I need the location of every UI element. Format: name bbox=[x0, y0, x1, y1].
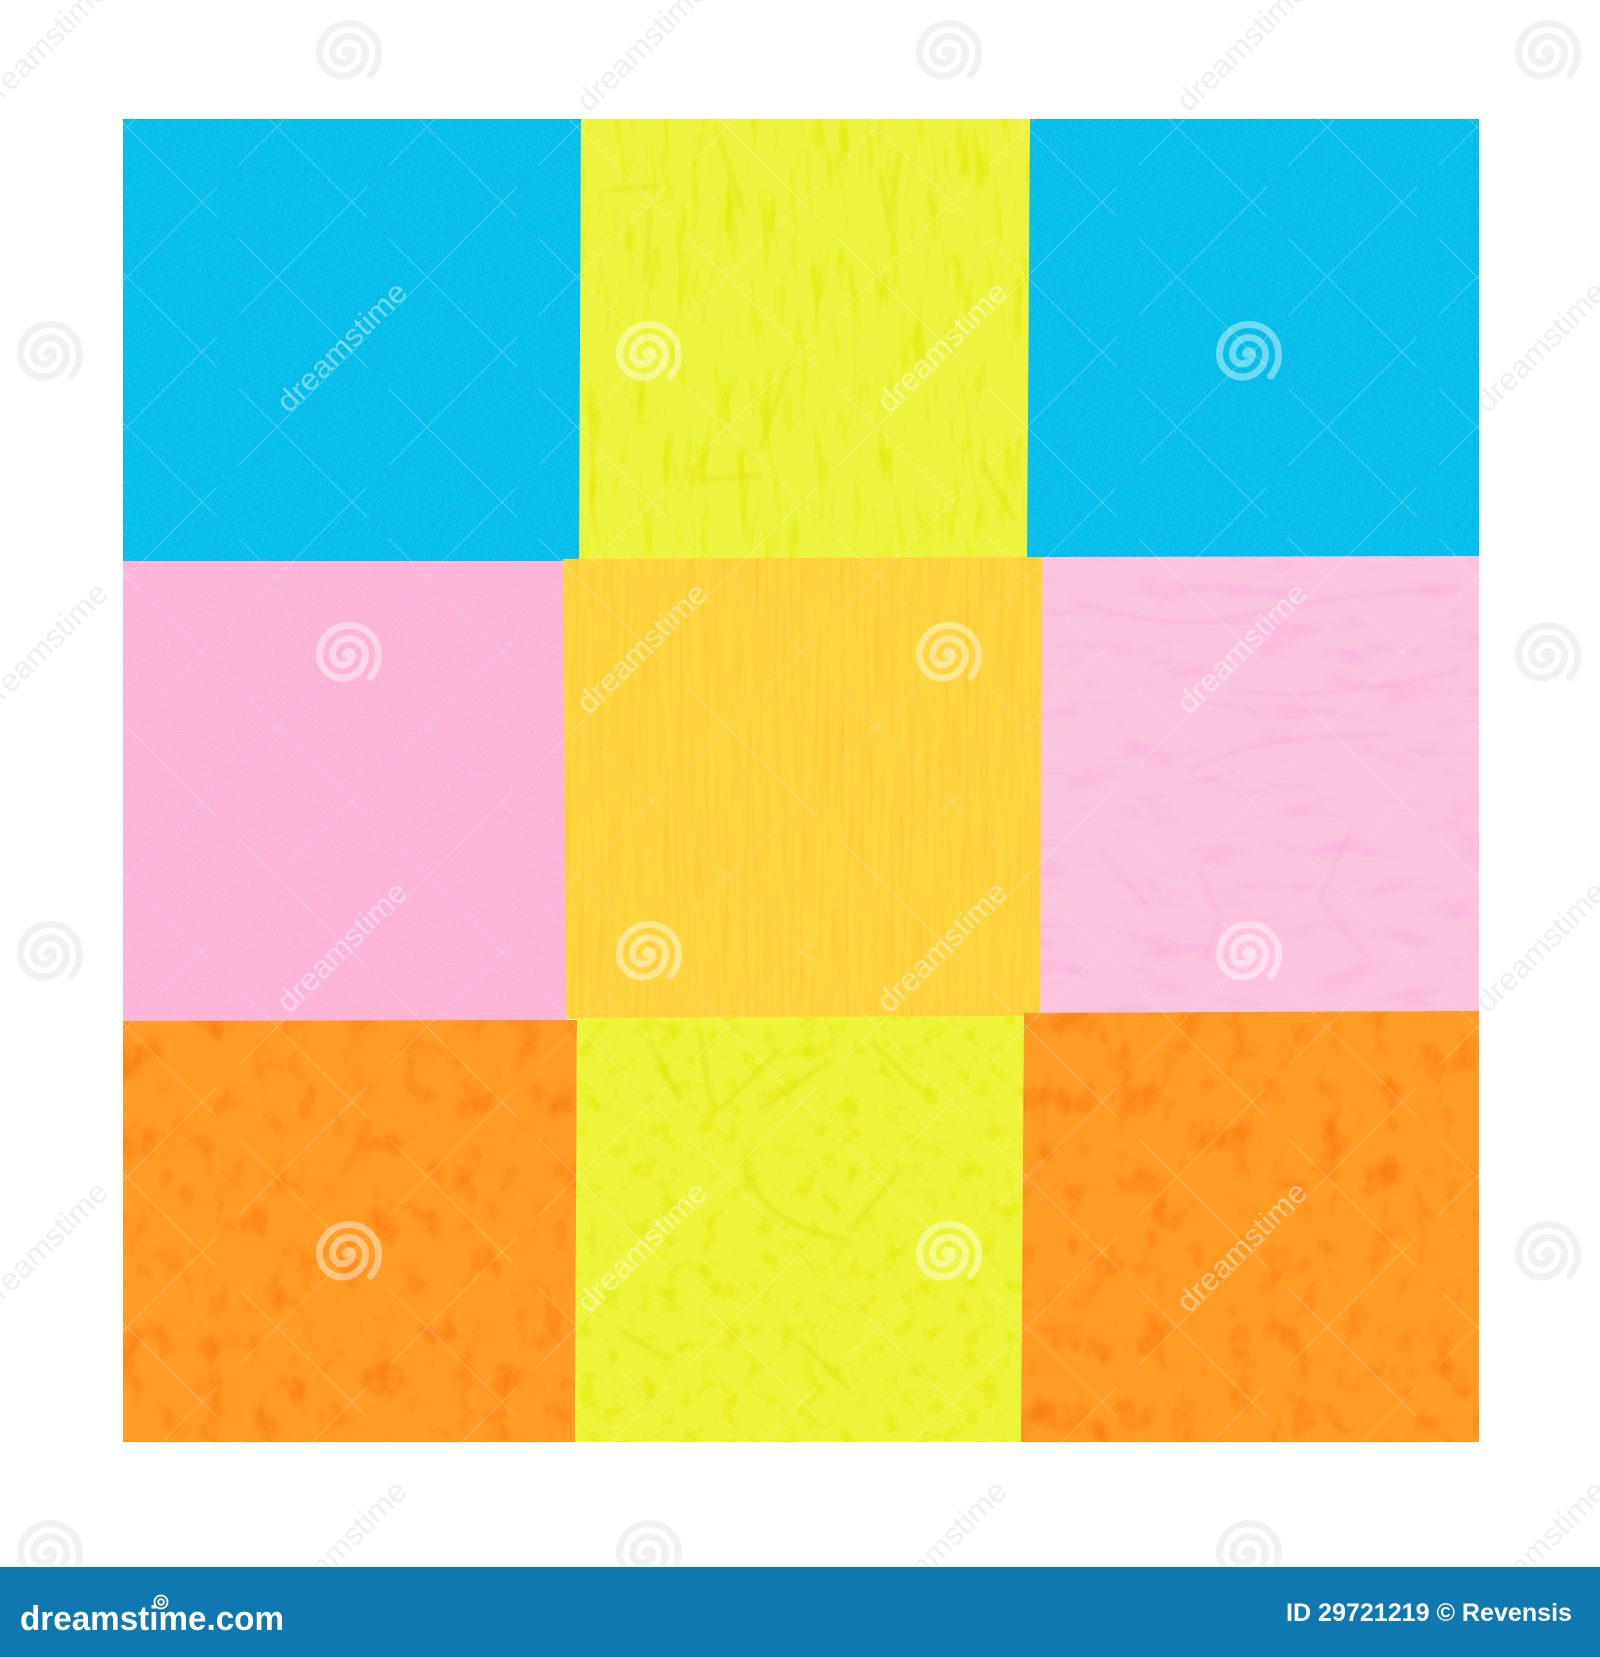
watermark wordmarks on colour: dreamstime bbox=[569, 1174, 714, 1319]
watermark wordmarks on colour: dreamstime bbox=[269, 874, 414, 1019]
watermark wordmarks on colour: dreamstime bbox=[569, 575, 714, 720]
panel: orange bottom left bbox=[123, 1020, 577, 1442]
panel: pink middle right bbox=[1040, 556, 1479, 1014]
icon: spiral logo bbox=[154, 1596, 168, 1608]
watermark wordmarks on colour: dreamstime bbox=[869, 874, 1014, 1019]
watermark wordmarks on colour: dreamstime bbox=[269, 274, 414, 419]
footer image id and credit: ID 29721219 © Revensis bbox=[1286, 1599, 1572, 1627]
panel: yellow bottom centre bbox=[575, 1016, 1024, 1442]
watermark wordmarks on colour bbox=[269, 274, 1314, 1319]
watermark diagonal lines bbox=[123, 119, 1479, 1442]
watermark spirals on colour bbox=[320, 324, 1279, 1277]
watermark wordmarks on colour: dreamstime bbox=[1169, 575, 1314, 720]
panel: blue top right bbox=[1027, 119, 1479, 558]
panel: pink middle left bbox=[123, 561, 567, 1022]
footer logo: dreamstime.com bbox=[20, 1600, 284, 1638]
panel: yellow orange centre bbox=[563, 557, 1043, 1019]
panel: blue top left bbox=[123, 119, 581, 562]
watermark wordmarks on white margin: dreamstime bbox=[269, 1473, 414, 1618]
watermark wordmarks on colour: dreamstime bbox=[869, 274, 1014, 419]
paper collage bbox=[123, 119, 1479, 1442]
watermark wordmarks on colour: dreamstime bbox=[1169, 1174, 1314, 1319]
watermark wordmarks on white margin: dreamstime bbox=[869, 1473, 1014, 1618]
panel: yellow top centre bbox=[579, 119, 1030, 561]
panel: orange bottom right bbox=[1021, 1011, 1479, 1442]
footer bar bbox=[0, 1567, 1600, 1657]
